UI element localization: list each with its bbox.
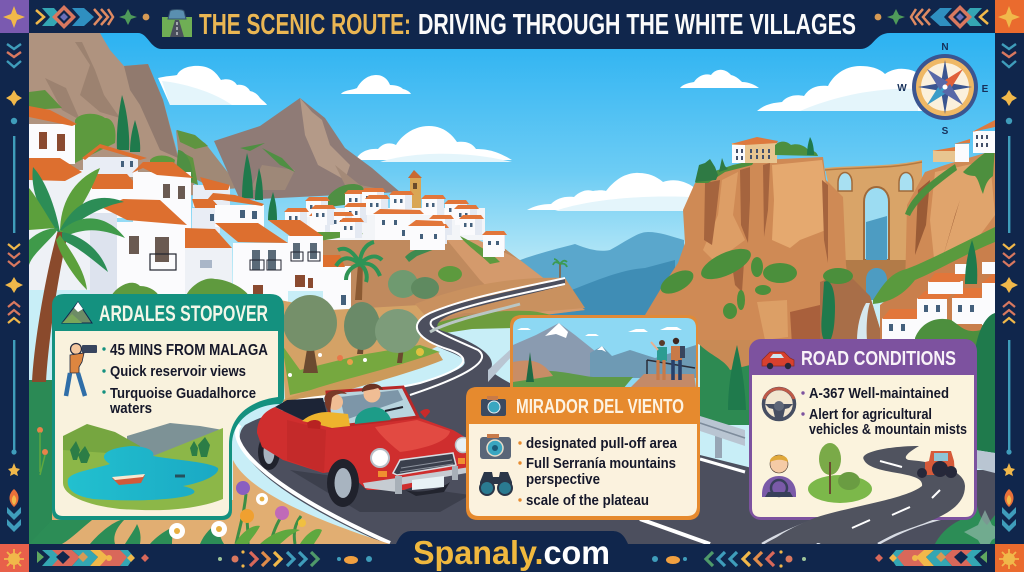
heading: Road Conditions: ROAD CONDITIONS xyxy=(801,347,956,370)
car: red convertible xyxy=(257,384,472,512)
compass letters: E xyxy=(982,84,989,95)
left mountain xyxy=(29,33,240,200)
right border xyxy=(995,0,1024,572)
icon: photographer xyxy=(66,344,97,396)
icon: binoculars xyxy=(480,472,512,495)
compass letters: S xyxy=(942,126,949,137)
right cliff xyxy=(895,146,995,330)
bullets: Road Conditions: Alert for agricultural xyxy=(809,406,932,423)
bullets: Mirador: perspective xyxy=(526,471,600,488)
bullets: Mirador: Full Serranía mountains xyxy=(526,455,676,472)
bottom pattern left xyxy=(37,550,372,568)
Ronda buildings xyxy=(731,120,995,163)
bullets: Ardales: Quick reservoir views xyxy=(110,363,246,380)
large palm tree xyxy=(29,167,125,382)
winding road xyxy=(237,278,1000,546)
corner: top left xyxy=(0,0,29,33)
bullets: Ardales: waters xyxy=(109,400,152,417)
bullets: Ardales xyxy=(102,342,268,417)
icon: small red car xyxy=(762,352,794,369)
bullets: Mirador: designated pull-off area xyxy=(526,435,678,452)
compass letters xyxy=(897,42,989,137)
middle mountain xyxy=(214,98,400,200)
right terraced houses xyxy=(873,227,995,453)
icon: steering wheel xyxy=(764,388,794,420)
bullets: Road Conditions xyxy=(801,385,967,438)
icon: camera header xyxy=(481,396,506,416)
illustration: tree and bush xyxy=(808,443,872,503)
village on hillside, foliage xyxy=(75,114,585,330)
bullets: Mirador xyxy=(518,435,678,509)
bullets: Ardales: 45 MINS FROM MALAGA xyxy=(110,342,268,359)
corner: top right xyxy=(995,0,1024,33)
heading: Ardales Stopover: ARDALES STOPOVER xyxy=(99,301,268,326)
icon: driver xyxy=(762,455,796,497)
illustration: winding mini road with tractor xyxy=(769,446,965,543)
compass letters: W xyxy=(897,83,907,94)
bullets: Road Conditions: A-367 Well-maintained xyxy=(809,385,949,402)
photo: mountain viewpoint xyxy=(510,315,698,392)
mid-ground palm xyxy=(336,242,567,300)
icon: mountain xyxy=(62,302,92,323)
top pattern left xyxy=(36,5,149,29)
corner: bottom left xyxy=(0,544,29,572)
bottom banner xyxy=(0,531,1024,572)
bullets: Ardales: Turquoise Guadalhorce xyxy=(110,385,256,402)
bullets: Mirador: scale of the plateau xyxy=(526,492,649,509)
title: THE SCENIC ROUTE: xyxy=(199,9,411,41)
clouds xyxy=(158,66,926,211)
left border xyxy=(0,0,29,572)
compass letters: N xyxy=(941,42,949,53)
main cliff xyxy=(645,157,885,425)
guard rails xyxy=(488,348,995,473)
title: DRIVING THROUGH THE WHITE VILLAGES xyxy=(418,9,856,41)
Ronda bridge xyxy=(825,160,922,300)
illustration: turquoise reservoir xyxy=(63,423,223,510)
bottom pattern right xyxy=(652,550,987,568)
heading: Mirador del Viento: MIRADOR DEL VIENTO xyxy=(516,395,684,418)
foreground plants and flowers xyxy=(29,380,1006,552)
website label: Spanaly.com xyxy=(413,534,610,571)
bullets: Road Conditions: vehicles & mountain mists xyxy=(809,421,967,438)
big white houses xyxy=(29,106,351,316)
cypress trees xyxy=(117,95,277,220)
panel: Mirador del Viento xyxy=(466,315,700,520)
panel: Ardales Stopover xyxy=(52,294,284,520)
corner: bottom right xyxy=(995,544,1024,572)
icon: camera xyxy=(480,434,511,459)
ground and olive trees xyxy=(280,278,585,410)
top pattern right xyxy=(875,5,988,29)
top banner xyxy=(0,0,1024,49)
icon: road and car xyxy=(162,10,192,37)
distant blue mountains xyxy=(514,232,684,330)
compass xyxy=(897,42,989,137)
panel: Road Conditions xyxy=(749,339,977,543)
